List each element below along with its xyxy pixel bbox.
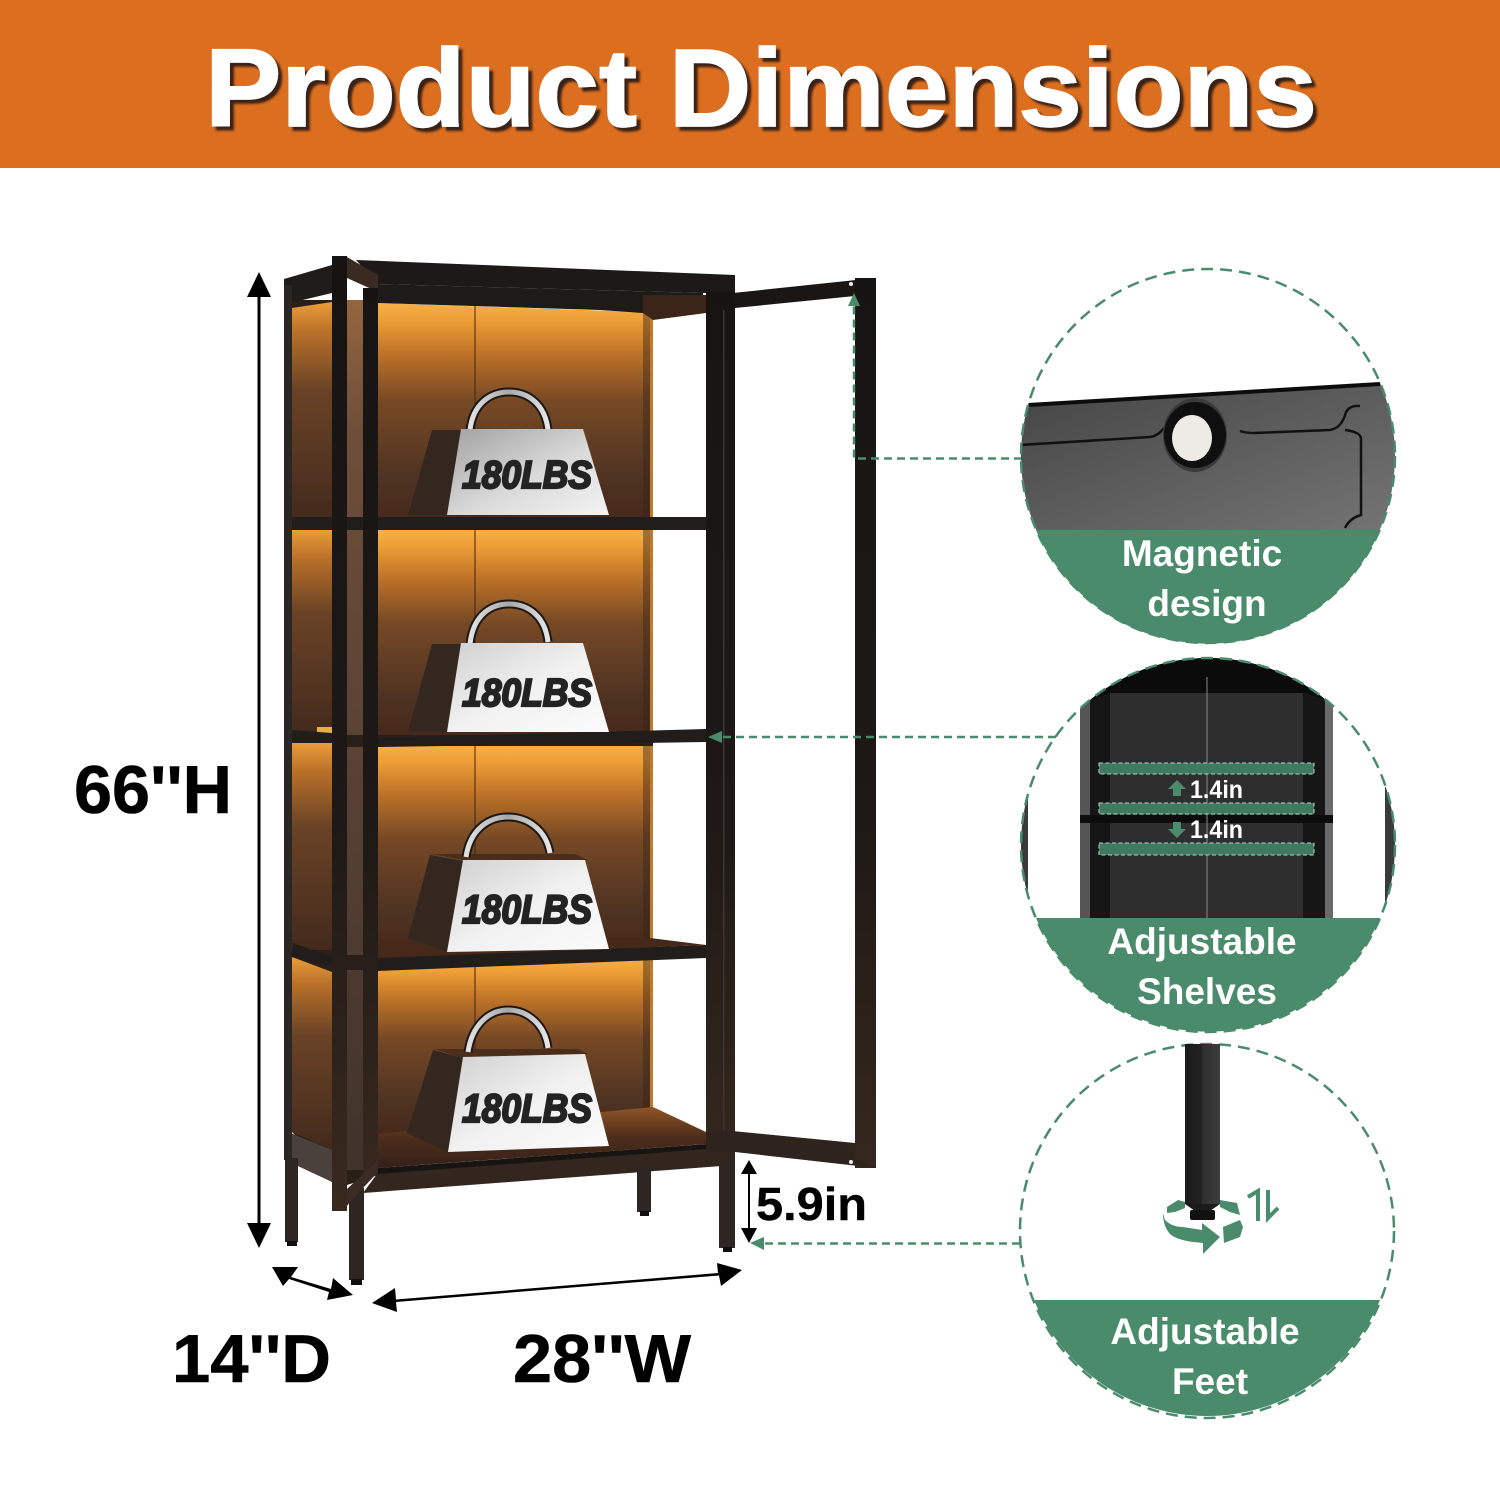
weight 1 [408,392,609,515]
caption [1110,1311,1300,1402]
height label: 66''H [74,752,232,828]
weight 1: 180LBS [462,454,592,497]
dashed circle [1021,269,1395,643]
depth label: 14''D [172,1321,331,1397]
spacing labels [1190,776,1243,844]
arrow down [1168,822,1186,838]
weight 4: 180LBS [462,1087,592,1131]
detail photo: magnetic catch [1020,382,1396,530]
panel: adjustable shelves [1020,655,1396,1032]
top frame [284,257,735,320]
arrow up [1168,780,1186,796]
cabinet floor [378,1107,706,1168]
weight 4 [407,1010,609,1152]
depth arrow [272,1267,353,1300]
height arrow [247,272,271,1248]
green caption band [1036,530,1380,644]
caption [1122,533,1282,624]
leg height label: 5.9in [756,1178,867,1230]
green caption band [1036,918,1380,1032]
rotation icon [1163,1200,1243,1254]
shelf slot bars [1099,763,1314,855]
panel: magnetic design [1020,269,1396,644]
header banner [0,0,1500,168]
shelves [292,517,706,971]
right post glass slit [723,310,724,1130]
title: Product Dimensions [205,27,1317,150]
connector: magnetic design [848,293,1022,458]
left door edge [332,256,378,1211]
dashed circle [1020,1044,1394,1418]
width arrow [372,1263,742,1312]
spacing labels: 1.4in [1190,816,1243,844]
weight 3: 180LBS [462,888,592,932]
weight 3 [408,817,609,952]
connector: adjustable shelves [708,731,1056,743]
weight 2: 180LBS [462,672,592,715]
up and down arrows [1248,1190,1278,1221]
caption: Adjustable [1110,1311,1300,1352]
right post [706,292,735,1152]
panel: adjustable feet [1020,1044,1394,1418]
adjustable leg [1185,1044,1220,1220]
weight 2 [408,604,609,732]
caption: Feet [1172,1361,1248,1402]
cabinet illustration [284,256,876,1285]
detail photo: shelf slots [1020,655,1396,920]
open door [706,278,876,1168]
dashed circle [1021,658,1395,1032]
caption: Magnetic [1122,533,1282,574]
bottom rail [285,1132,735,1193]
caption [1107,921,1297,1012]
caption: Adjustable [1107,921,1297,962]
left side post [284,285,292,1160]
cabinet interior: lit back panel sections [292,300,653,1185]
green caption band [1034,1300,1380,1416]
caption: Shelves [1137,971,1277,1012]
legs [285,1158,735,1285]
spacing labels: 1.4in [1190,776,1243,804]
caption: design [1147,583,1267,624]
connector: adjustable feet [750,1237,1020,1250]
width label: 28''W [513,1321,692,1397]
leg height arrow [741,1160,757,1243]
